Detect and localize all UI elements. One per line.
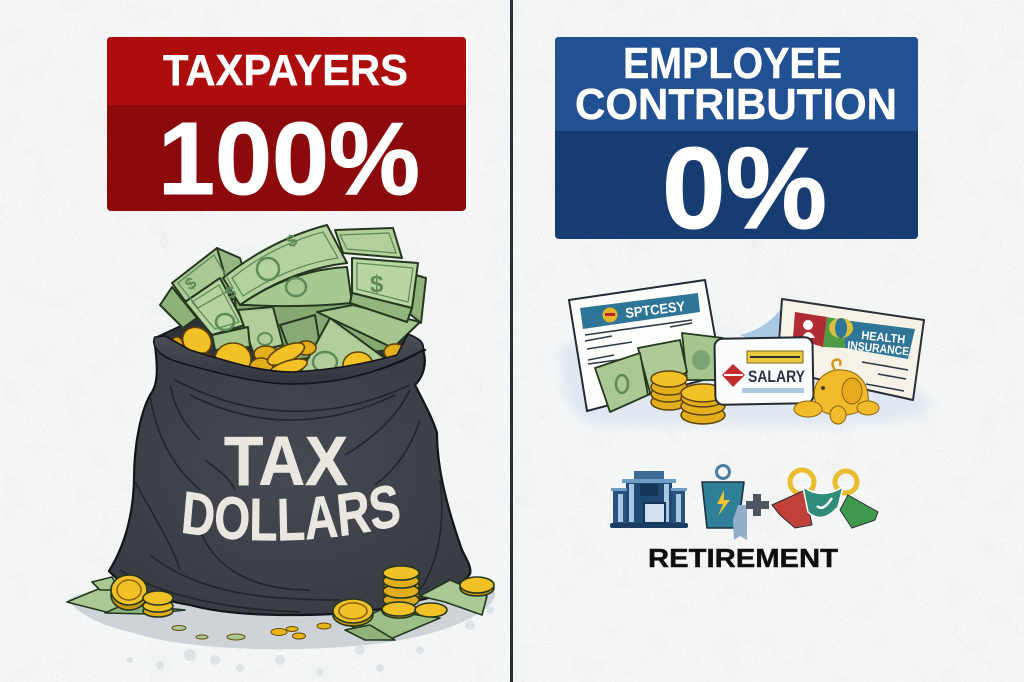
bag label: tax dollars: [182, 422, 400, 541]
document: health insurance: INSURANCE: [847, 338, 910, 358]
document: SPTCESY: [569, 280, 722, 411]
bag folds: [120, 380, 442, 612]
bag label: tax dollars: DOLLARS: [182, 486, 400, 541]
icon: keys and tags: [772, 470, 878, 528]
banknotes: [160, 225, 426, 377]
banknote details: $: [284, 230, 301, 252]
document: health insurance: HEALTH: [861, 328, 906, 347]
document: health insurance: [740, 299, 924, 400]
banknote details: $: [370, 271, 384, 298]
panel: employee contribution header: [555, 37, 918, 253]
bag body: [109, 345, 470, 615]
coins in the bag: [171, 322, 406, 381]
illustration: employee benefits: [560, 280, 930, 425]
document: SPTCESY: SPTCESY: [624, 298, 687, 321]
ground blotches: [127, 606, 494, 676]
salary card: [714, 337, 814, 405]
ground wash: [560, 310, 930, 425]
icon: plus sign: [746, 494, 769, 516]
ground shadow: [68, 572, 495, 649]
toppled piggy bank: [794, 360, 879, 424]
salary card: SALARY: [748, 367, 806, 386]
spilled money, left: [67, 575, 185, 617]
heading: employee contribution: EMPLOYEE: [623, 39, 842, 88]
scattered coins: [172, 623, 331, 640]
banknote details: [178, 230, 413, 372]
illustration: retirement icons: [610, 466, 878, 540]
bag rim fold: [154, 334, 423, 384]
heading: taxpayers: TAXPAYERS: [163, 46, 408, 95]
illustration: money bag: [66, 224, 496, 676]
figure: 100 percent: 100%: [158, 101, 420, 216]
banknotes: [595, 333, 723, 412]
icon: tag bag with lightning: [702, 466, 747, 540]
centre divider: [510, 0, 513, 682]
coin stacks: [651, 371, 725, 424]
bag back rim: [155, 317, 425, 372]
spilled money, right: [333, 566, 494, 640]
panel: taxpayers header: [107, 37, 466, 216]
icon: pension building: [610, 471, 688, 528]
label: retirement: RETIREMENT: [648, 543, 838, 573]
heading: employee contribution: [575, 39, 897, 129]
banknote details: $: [221, 282, 240, 303]
heading: employee contribution: CONTRIBUTION: [575, 80, 897, 129]
bag label: tax dollars: TAX: [224, 422, 348, 500]
banknote details: $: [181, 273, 200, 294]
figure: 0 percent: 0%: [662, 123, 827, 253]
